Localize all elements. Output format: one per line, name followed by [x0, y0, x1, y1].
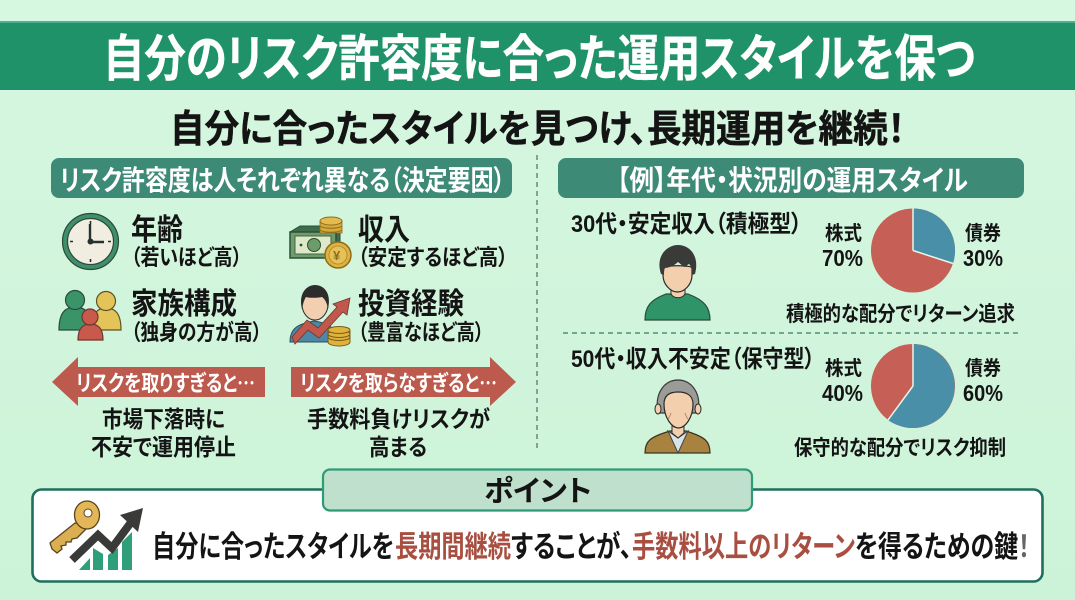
- subtitle: 自分に合ったスタイルを見つけ、長期運用を継続！: [170, 109, 905, 151]
- labels: bonds 60%: 60%: [963, 380, 1003, 406]
- text: too much risk consequence: [91, 406, 236, 460]
- tab: point: [323, 470, 752, 510]
- labels: bonds 30%: [963, 222, 1003, 271]
- arrow: too much risk: [52, 357, 265, 406]
- text: key message: 長期間継続: [395, 531, 511, 564]
- icon: key and rising chart: [50, 501, 143, 570]
- factor: income: （安定するほど高）: [358, 245, 508, 270]
- factor: investment experience: （豊富なほど高）: [358, 320, 484, 345]
- heading: risk tolerance: リスク許容度は人それぞれ異なる（決定要因）: [60, 165, 505, 196]
- text: too little risk consequence: 高まる: [369, 434, 427, 460]
- icon: clock: [62, 214, 118, 270]
- text: key message: 自分に合ったスタイルを: [152, 531, 394, 564]
- factor: family structure: （独身の方が高）: [131, 320, 262, 345]
- factor: family structure: [131, 288, 262, 345]
- labels: stocks 70%: 70%: [822, 245, 863, 271]
- icon: young person: [645, 245, 710, 320]
- factor: income: [358, 214, 508, 270]
- example heading: age 30s: 30代・安定収入（積極型）: [571, 211, 802, 238]
- text: too little risk consequence: 手数料負けリスクが: [307, 406, 490, 432]
- factor: age: [131, 214, 242, 270]
- text: key message: [152, 530, 1030, 564]
- caption: aggressive allocation: 積極的な配分でリターン追求: [786, 303, 1015, 326]
- pie chart: 50s: [871, 344, 955, 428]
- arrow: too little risk: リスクを取らなすぎると…: [300, 366, 497, 398]
- labels: bonds 60%: [963, 357, 1003, 406]
- icon: older person: [645, 380, 710, 453]
- labels: stocks 40%: 40%: [822, 380, 863, 406]
- icon: family: [59, 290, 121, 340]
- text: key message: することが、: [511, 530, 632, 564]
- labels: bonds 30%: 債券: [965, 222, 1001, 245]
- panel: risk tolerance factors: [51, 158, 516, 460]
- text: too much risk consequence: 市場下落時に: [102, 406, 225, 432]
- heading: risk tolerance: [51, 158, 512, 198]
- labels: stocks 70%: 株式: [825, 222, 862, 245]
- factor: age: 年齢: [131, 214, 183, 247]
- text: key message: を得るための鍵！: [855, 531, 1030, 564]
- example heading: age 50s: 50代・収入不安定（保守型）: [571, 346, 815, 373]
- icon: money and coins: [290, 217, 351, 268]
- labels: bonds 30%: 30%: [963, 245, 1003, 271]
- text: key message: 手数料以上のリターン: [632, 531, 855, 564]
- icon: money and coins: ¥: [333, 248, 341, 263]
- factor: income: 収入: [358, 214, 410, 247]
- factor: investment experience: 投資経験: [358, 288, 464, 321]
- labels: stocks 70%: [822, 222, 863, 271]
- heading: examples: 【例】年代・状況別の運用スタイル: [617, 165, 968, 196]
- title banner: [0, 21, 1075, 90]
- text: too much risk consequence: 不安で運用停止: [91, 434, 236, 460]
- pie chart: 30s: [871, 208, 955, 292]
- labels: stocks 40%: 株式: [825, 357, 862, 380]
- labels: stocks 40%: [822, 357, 863, 406]
- labels: bonds 60%: 債券: [965, 357, 1001, 380]
- factor: investment experience: [358, 288, 484, 345]
- tab: point: ポイント: [484, 475, 592, 508]
- caption: conservative allocation: 保守的な配分でリスク抑制: [794, 437, 1006, 460]
- icon: investor with rising arrow: [290, 285, 350, 346]
- text: too little risk consequence: [307, 406, 490, 460]
- factor: age: （若いほど高）: [131, 245, 242, 270]
- panel: style examples: [558, 158, 1024, 460]
- arrow: too much risk: リスクを取りすぎると…: [76, 366, 255, 398]
- panel: key point: [32, 470, 1042, 582]
- heading: examples: [558, 158, 1024, 198]
- factor: family structure: 家族構成: [131, 288, 237, 321]
- arrow: too little risk: [291, 357, 516, 406]
